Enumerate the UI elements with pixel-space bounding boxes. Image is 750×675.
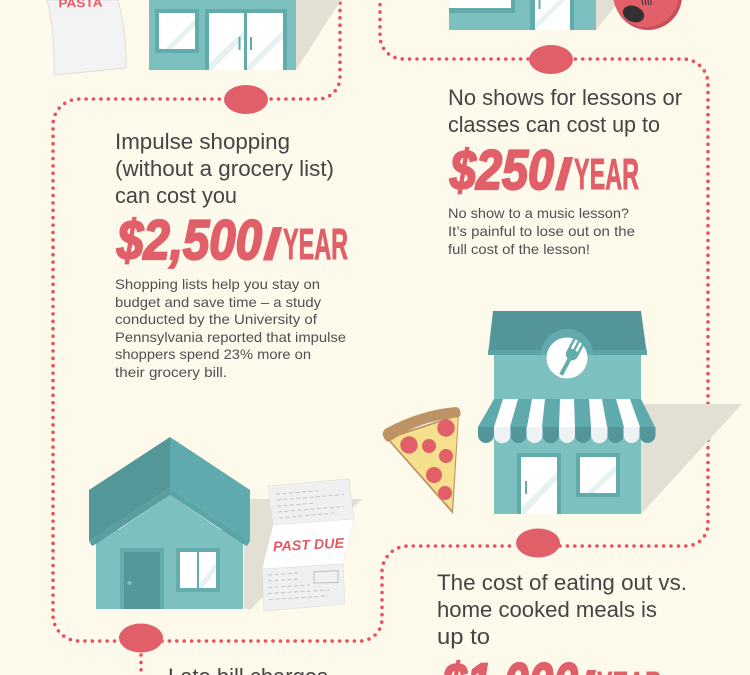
text block: no shows: / (555, 150, 573, 199)
top right store (449, 0, 620, 30)
text block: no shows: It’s painful to lose out on the (448, 223, 635, 239)
text block: no shows: $250 (449, 138, 554, 201)
text block: eating out (437, 570, 687, 675)
restaurant (478, 311, 742, 514)
text block: impulse shopping: conducted by the University of (115, 311, 317, 327)
icon: pizza slice (383, 407, 461, 514)
text block: no shows: classes can cost up to (448, 112, 660, 137)
icon: bowling ball (613, 0, 682, 30)
past due bill (262, 479, 354, 611)
icon: fork (556, 337, 585, 378)
text block: no shows: No show to a music lesson? (448, 205, 629, 221)
text block: eating out: up to (437, 624, 490, 649)
text block: impulse shopping: (without a grocery list) (115, 156, 334, 181)
grocery list paper (47, 0, 126, 75)
top left store (149, 0, 341, 70)
text block: impulse shopping: Pennsylvania reported that impulse (115, 329, 346, 345)
text block: impulse shopping: $2,500 (116, 208, 262, 271)
text block: impulse shopping: YEAR (283, 220, 348, 269)
text block: eating out: home cooked meals is (437, 597, 657, 622)
node: bottom right (516, 528, 560, 558)
house (89, 437, 362, 610)
node: bottom left (119, 624, 163, 652)
past due bill: PAST DUE (273, 535, 345, 554)
text block: impulse shopping: Shopping lists help you stay on (115, 276, 320, 292)
text block: impulse shopping: shoppers spend 23% more on (115, 346, 311, 362)
text block: impulse shopping: Impulse shopping (115, 129, 290, 154)
node: top left (224, 85, 268, 114)
text block: no shows: YEAR (574, 150, 639, 199)
text block: no shows (448, 85, 682, 257)
text block: impulse shopping: their grocery bill. (115, 364, 227, 380)
node: top right (529, 45, 573, 74)
text block: impulse shopping: can cost you (115, 183, 237, 208)
text block: impulse shopping: budget and save time – a study (115, 294, 321, 310)
text block: impulse shopping (115, 129, 348, 380)
text block: eating out: The cost of eating out vs. (437, 570, 687, 595)
text block: no shows: full cost of the lesson! (448, 241, 590, 257)
text block: no shows: No shows for lessons or (448, 85, 682, 110)
text block: impulse shopping: / (263, 220, 282, 269)
